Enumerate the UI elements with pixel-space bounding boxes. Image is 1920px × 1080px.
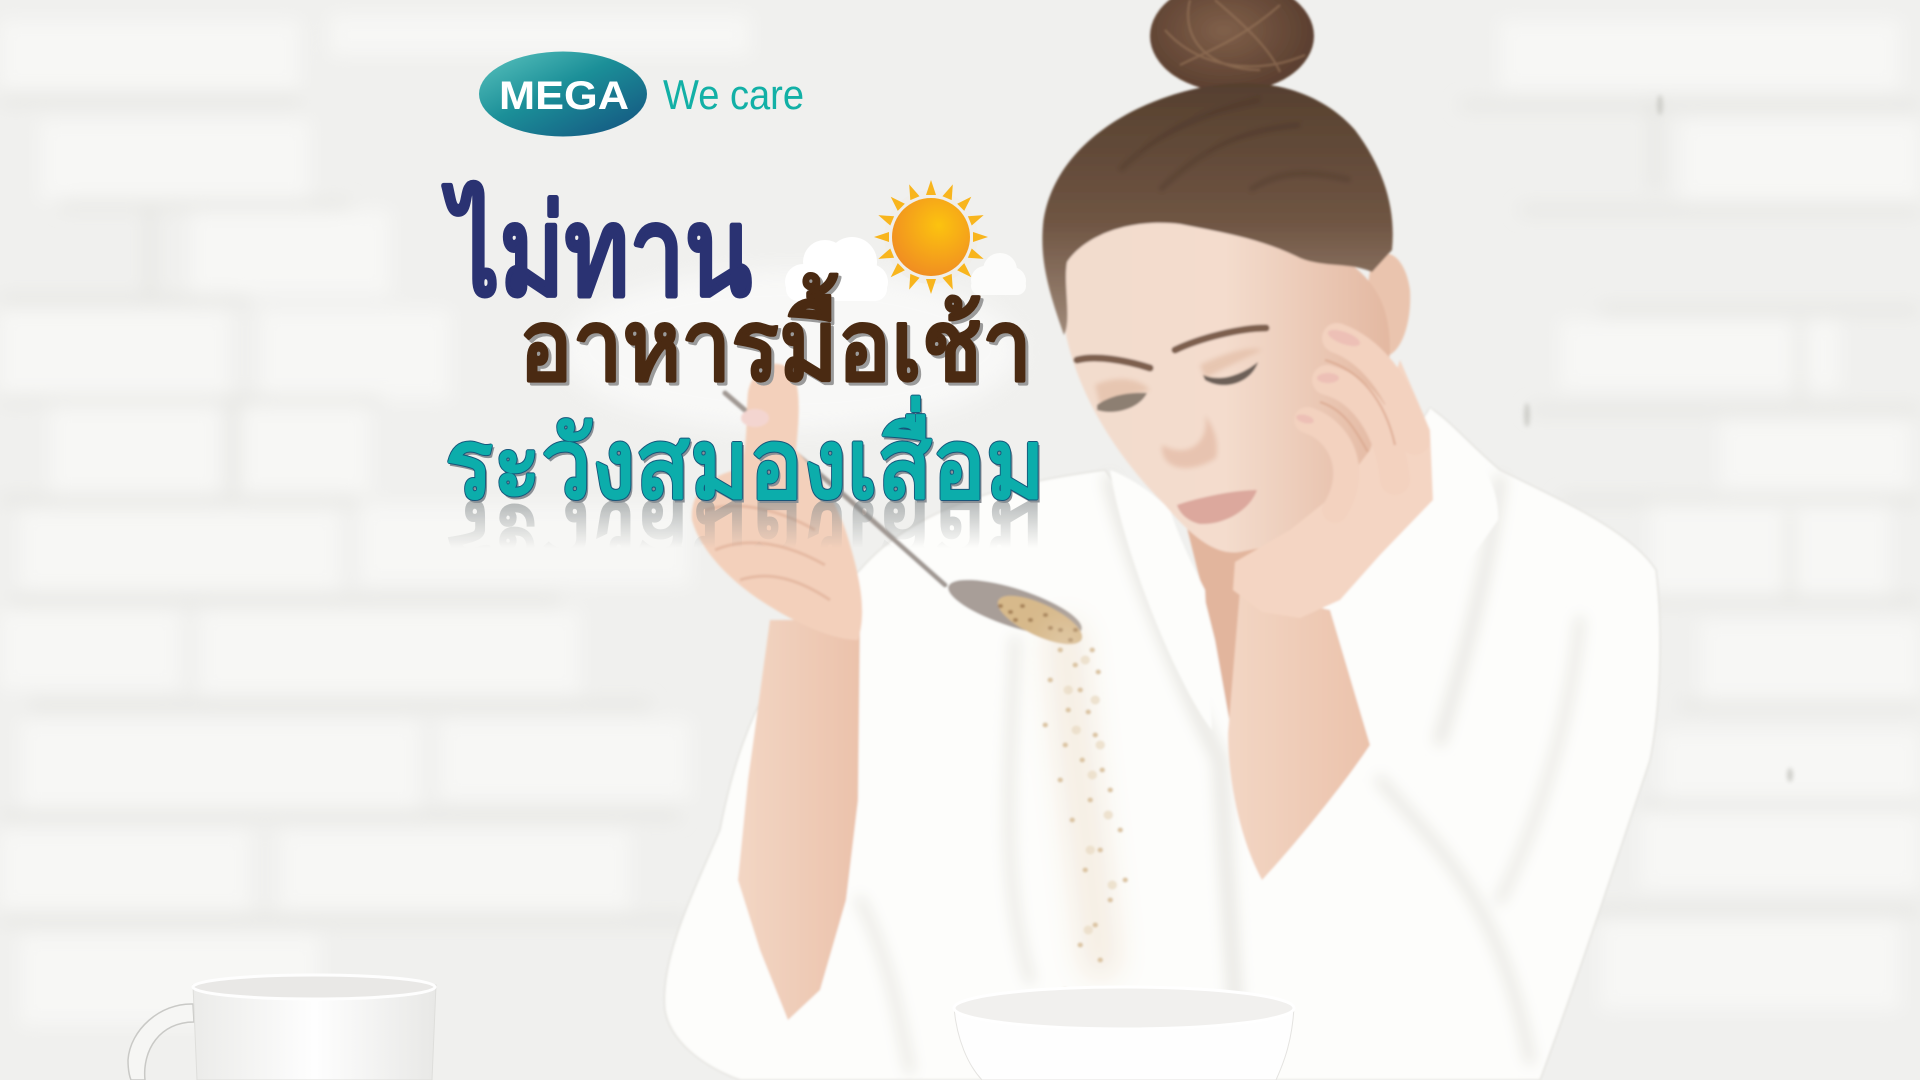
- icon: sun: [874, 180, 988, 294]
- eyebrows: [1077, 328, 1266, 368]
- lips: [1177, 490, 1257, 524]
- icon: left cloud: [785, 237, 888, 301]
- neck and chest skin: [1180, 500, 1300, 735]
- oats on spoon: [992, 586, 1088, 654]
- ear: [1368, 253, 1410, 356]
- finger creases: [705, 506, 830, 600]
- white cereal bowl: [954, 987, 1294, 1080]
- title line 3: ระวังสมองเสื่อม: [445, 395, 1045, 519]
- title line 3: ระวังสมองเสื่อม: [447, 398, 1047, 522]
- eyes: [1097, 362, 1258, 412]
- thumbnail: [741, 409, 769, 427]
- title line 2: อาหารมื้อเช้า: [519, 272, 1032, 402]
- nose shadow: [1162, 415, 1217, 468]
- logo: MEGA We care: [479, 52, 804, 136]
- title: [441, 181, 1047, 605]
- eyelid shading: [1095, 349, 1262, 405]
- soft glow behind the headline: [560, 270, 1020, 430]
- title line 2: อาหารมื้อเช้า: [522, 275, 1035, 405]
- robe folds: [860, 480, 1580, 1070]
- logo: MEGA We care: MEGA: [499, 74, 629, 118]
- icon: right cloud: [971, 253, 1026, 295]
- collar: [1110, 470, 1212, 730]
- spoon: [725, 393, 1087, 648]
- hair: [1042, 83, 1393, 335]
- hair highlights: [1120, 100, 1350, 190]
- left arm: [738, 620, 860, 1020]
- white mug: [128, 975, 436, 1080]
- hand holding spoon: [692, 364, 862, 640]
- title line 1: ไม่ทาน: [441, 181, 752, 322]
- title line 3 reflection: ระวังสมองเสื่อม: [445, 481, 1045, 605]
- face: [1060, 219, 1390, 552]
- right arm: [1228, 590, 1370, 880]
- woman in white bathrobe: [664, 0, 1660, 1080]
- fingernails: [1295, 327, 1362, 425]
- robe body: [664, 408, 1660, 1080]
- logo: MEGA We care: We care: [663, 71, 804, 118]
- hair bun: [1150, 0, 1314, 92]
- hair strands on bun: [1165, 0, 1305, 72]
- falling oats: [1045, 640, 1126, 990]
- supporting hand: [1233, 338, 1433, 618]
